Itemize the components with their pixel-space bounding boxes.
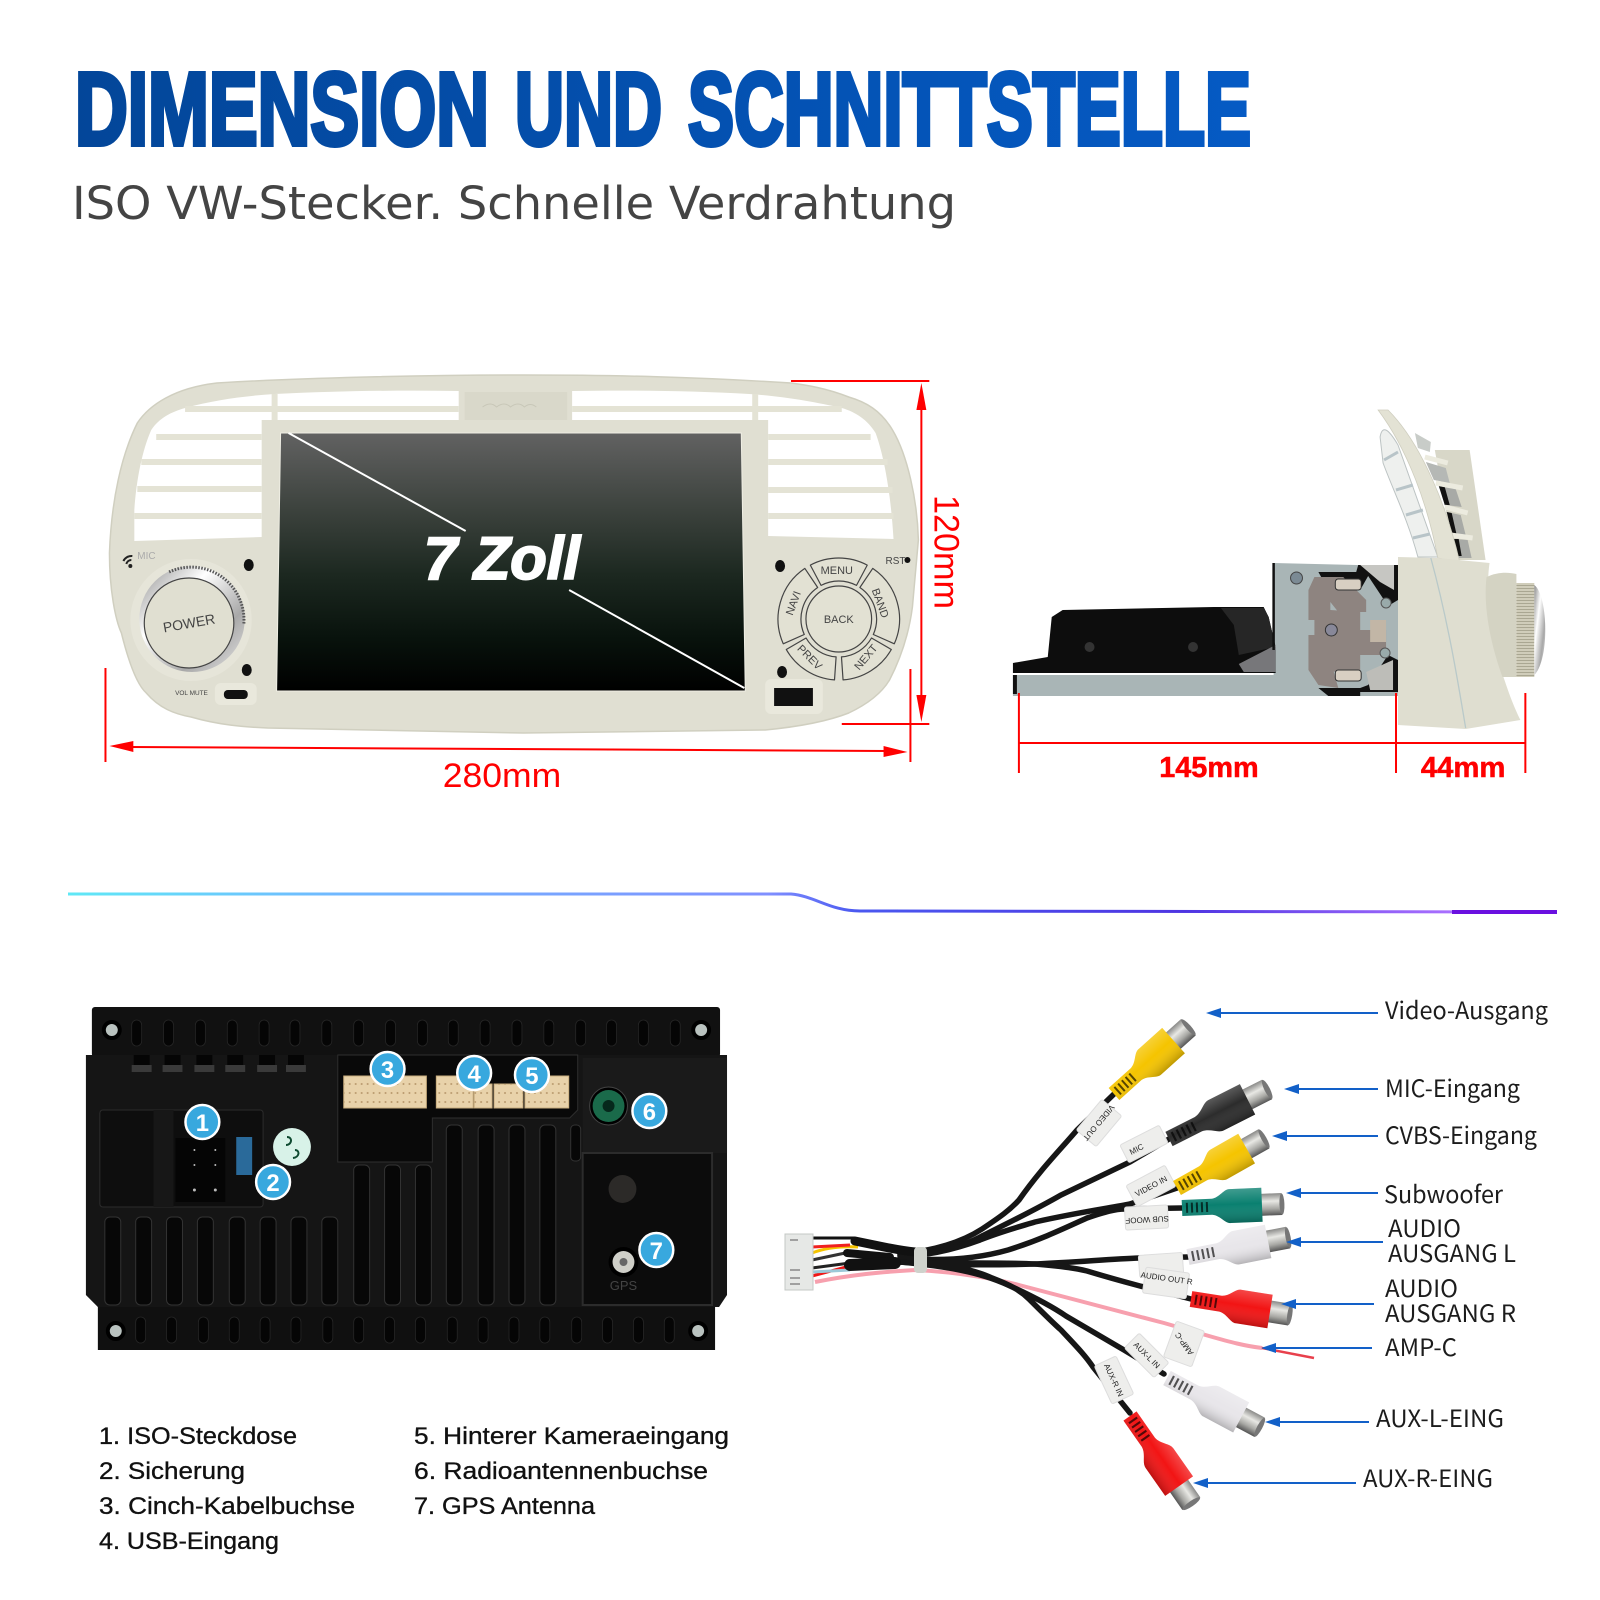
panel: side view of the radio	[1013, 410, 1545, 784]
height dimension	[791, 381, 929, 762]
arrow: cvbs-eingang	[1272, 1131, 1378, 1141]
button labels: BAND	[869, 587, 890, 620]
top grille cap	[1415, 433, 1431, 452]
arrow: aux-r-eing	[1193, 1478, 1356, 1488]
label: audio ausgang l: AUSGANG L	[1388, 1234, 1516, 1269]
tag: amp-c: AMP-C	[1173, 1330, 1195, 1357]
button labels: NEXT	[852, 642, 881, 673]
tag: video in	[1126, 1165, 1176, 1207]
label: audio ausgang l	[1388, 1209, 1516, 1269]
legend right column: 5. Hinterer Kameraeingang	[414, 1423, 729, 1450]
usb-c port	[215, 683, 257, 705]
gps socket	[609, 1247, 638, 1293]
device bezel	[109, 375, 918, 733]
mic icon and label	[123, 551, 156, 568]
button labels: MENU	[821, 565, 853, 577]
title: SCHNITTSTELLE	[688, 52, 1251, 166]
plug: green subwoofer	[1181, 1187, 1285, 1225]
7 Zoll label: 7 Zoll	[424, 525, 581, 592]
width label: 280mm	[443, 757, 561, 795]
plug: yellow video out	[1103, 1013, 1202, 1107]
title: UND	[515, 52, 662, 166]
tag: video in: VIDEO IN	[1134, 1174, 1169, 1199]
tag: video out	[1075, 1098, 1123, 1148]
tag: audio out r: AUDIO OUT R	[1140, 1270, 1193, 1287]
label: cvbs-eingang: CVBS-Eingang	[1385, 1116, 1537, 1151]
fuse	[236, 1137, 252, 1175]
callout 6	[632, 1094, 666, 1128]
label: amp-c: AMP-C	[1385, 1328, 1457, 1363]
legend right column: 6. Radioantennenbuchse	[414, 1458, 708, 1485]
lower vent slots	[105, 1125, 581, 1305]
tag: amp-c	[1163, 1321, 1205, 1367]
plug: white audio l	[1185, 1220, 1294, 1274]
knob ridged ring	[1516, 583, 1534, 677]
button labels: PREV	[794, 643, 824, 673]
tag: mic: MIC	[1128, 1142, 1145, 1157]
arrow: video-ausgang	[1206, 1008, 1378, 1018]
callout 1: 1	[196, 1110, 209, 1137]
callout 2	[256, 1165, 290, 1199]
tag: audio out l	[1138, 1252, 1184, 1277]
tag: video out: VIDEO OUT	[1081, 1103, 1116, 1143]
width dimension	[105, 668, 907, 762]
callout 6: 6	[643, 1099, 656, 1126]
callout 4	[457, 1056, 491, 1090]
right upper panel	[583, 1058, 727, 1153]
bottom strip slots	[136, 1317, 674, 1343]
screws	[104, 1022, 709, 1339]
title	[75, 52, 1251, 166]
panel: rca cable harness	[785, 1013, 1314, 1516]
button cluster	[778, 558, 900, 680]
connector 3	[344, 1076, 426, 1108]
top notches	[132, 1065, 306, 1072]
label: audio ausgang l: AUDIO	[1388, 1209, 1461, 1244]
label: video-ausgang: Video-Ausgang	[1385, 991, 1548, 1026]
pale circle marker	[273, 1128, 311, 1166]
tag: sub woofer	[1124, 1205, 1169, 1230]
callout 3: 3	[381, 1057, 394, 1084]
power knob: POWER	[162, 611, 216, 635]
plug: red aux r	[1116, 1406, 1207, 1516]
vol mute label: VOL MUTE	[175, 690, 209, 697]
legend left column: 2. Sicherung	[99, 1458, 245, 1485]
gps socket: GPS	[610, 1278, 637, 1293]
arrow: aux-l-eing	[1265, 1417, 1369, 1427]
cable tie	[914, 1247, 927, 1273]
plug: yellow cvbs	[1169, 1123, 1275, 1203]
callout 5: 5	[525, 1063, 539, 1090]
subtitle: ISO VW-Stecker. Schnelle Verdrahtung	[72, 177, 956, 230]
arrow: audio ausgang r	[1281, 1299, 1374, 1309]
legend left column	[99, 1423, 355, 1555]
right lower panel	[583, 1153, 712, 1305]
arrow: mic-eingang	[1284, 1084, 1378, 1094]
callout 3	[371, 1052, 404, 1086]
center tab	[465, 392, 567, 420]
panel: front view of the radio with dimensions	[105, 375, 965, 795]
knob chrome cap	[1534, 585, 1545, 675]
diagonal line lower	[569, 590, 744, 688]
arrow: audio ausgang l	[1286, 1237, 1383, 1247]
callout 7: 7	[650, 1238, 663, 1265]
vent windows	[1426, 462, 1472, 558]
callout 7	[639, 1233, 673, 1267]
plug: red audio r	[1188, 1282, 1295, 1332]
label: mic-eingang: MIC-Eingang	[1385, 1069, 1520, 1104]
tag: mic	[1120, 1125, 1168, 1163]
connector 4 and 5	[436, 1076, 569, 1108]
red depth dimension	[1019, 693, 1525, 773]
legend left column: 3. Cinch-Kabelbuchse	[99, 1493, 355, 1520]
top strip slots	[132, 1020, 680, 1046]
button labels	[784, 565, 890, 673]
tag: aux-r in	[1094, 1356, 1134, 1404]
rst label: RST	[886, 556, 905, 567]
top strip	[92, 1007, 720, 1057]
bezel blade	[1378, 410, 1460, 562]
arrow: subwoofer	[1286, 1188, 1378, 1198]
label: subwoofer: Subwoofer	[1384, 1175, 1504, 1210]
tag: audio out r	[1138, 1266, 1194, 1300]
pink wire	[815, 1270, 1262, 1348]
mic icon and label: MIC	[137, 551, 156, 562]
label: audio ausgang r: AUSGANG R	[1385, 1294, 1516, 1329]
right vents	[572, 391, 894, 539]
metal bracket	[1308, 565, 1398, 696]
panel: rear view of the unit	[86, 1007, 727, 1350]
callout 5	[515, 1058, 549, 1092]
bezel seam	[1431, 558, 1466, 728]
tag: sub woofer: SUB WOOF	[1125, 1214, 1169, 1225]
thin coloured wires	[812, 1238, 858, 1276]
vent slats	[1425, 457, 1473, 538]
vent plate	[1435, 450, 1486, 560]
iso recess	[100, 1110, 263, 1207]
usb-a port	[765, 679, 823, 714]
diagonal line upper	[289, 433, 466, 531]
label: aux-r-eing: AUX-R-EING	[1363, 1459, 1493, 1494]
bottom strip	[98, 1305, 715, 1350]
rear grille behind bezel	[1380, 430, 1438, 557]
main body	[86, 1055, 727, 1307]
title: DIMENSION	[75, 52, 489, 166]
label: audio ausgang r	[1385, 1269, 1516, 1329]
label: aux-l-eing: AUX-L-EING	[1376, 1399, 1504, 1434]
heat shrink sleeves	[847, 1241, 915, 1265]
plug: white aux l	[1159, 1363, 1270, 1444]
44mm label: 44mm	[1421, 752, 1505, 784]
white connector	[785, 1234, 813, 1290]
145mm label: 145mm	[1159, 752, 1259, 784]
power knob	[130, 559, 252, 681]
knob housing	[1486, 573, 1516, 677]
holes	[242, 559, 787, 678]
left vents	[134, 391, 459, 541]
callout 2: 2	[266, 1170, 280, 1197]
height label: 120mm	[926, 495, 965, 609]
connector recess	[338, 1055, 578, 1162]
radio antenna socket	[590, 1087, 627, 1125]
legend right column	[414, 1423, 729, 1520]
arrow: amp-c	[1261, 1343, 1372, 1353]
hole	[609, 1175, 636, 1203]
rear chassis	[1013, 563, 1398, 696]
legend left column: 1. ISO-Steckdose	[99, 1423, 297, 1450]
tag: aux-l in: AUX-L IN	[1132, 1340, 1162, 1371]
tag: aux-r in: AUX-R IN	[1102, 1362, 1125, 1398]
pink wire tip	[1262, 1348, 1314, 1358]
tag: aux-l in	[1124, 1333, 1169, 1378]
black cables	[900, 1094, 1191, 1413]
legend right column: 7. GPS Antenna	[414, 1493, 595, 1520]
bezel side body	[1398, 557, 1520, 729]
plug: black mic	[1161, 1073, 1277, 1154]
label: audio ausgang r: AUDIO	[1385, 1269, 1458, 1304]
legend left column: 4. USB-Eingang	[99, 1528, 279, 1555]
button labels: BACK	[824, 614, 854, 626]
divider wave line	[68, 894, 1557, 914]
callout 1	[185, 1105, 219, 1139]
screen	[277, 433, 745, 691]
callout 4: 4	[468, 1061, 481, 1088]
button labels: NAVI	[784, 590, 804, 617]
